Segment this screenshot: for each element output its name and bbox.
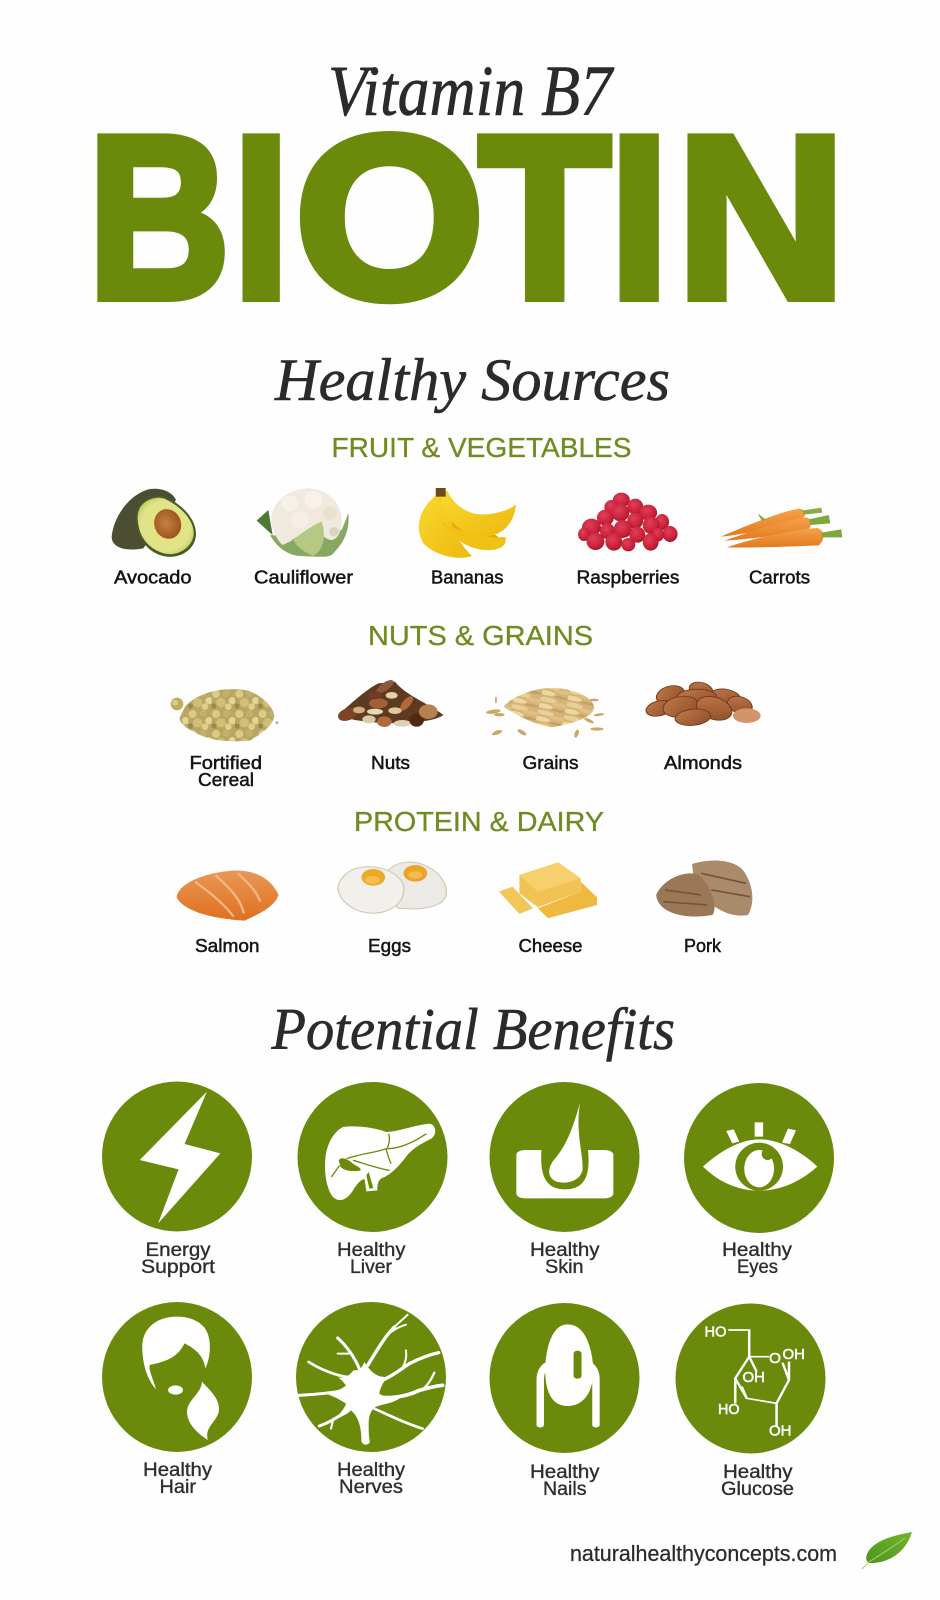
food: cheese xyxy=(499,862,597,956)
icon: woman with ponytail in circle xyxy=(102,1302,252,1452)
label: Healthy Glucose: Glucose xyxy=(721,1479,794,1500)
icon: glucose molecule in circle: OH xyxy=(769,1422,792,1440)
label: Healthy Nails: Nails xyxy=(543,1479,586,1500)
label: Grains: Grains xyxy=(522,752,578,773)
benefit: healthy skin xyxy=(490,1082,640,1278)
label: Healthy Nails xyxy=(530,1462,600,1500)
icon: neuron in circle xyxy=(296,1302,446,1452)
icon: glucose molecule in circle: OH xyxy=(742,1369,765,1386)
benefit: healthy glucose xyxy=(676,1304,826,1500)
label: Energy Support xyxy=(141,1240,216,1278)
food: salmon xyxy=(177,870,279,956)
title block xyxy=(88,51,846,347)
label: Healthy Glucose xyxy=(721,1462,794,1500)
label: Almonds: Almonds xyxy=(664,752,742,773)
icon: cereal xyxy=(171,689,278,741)
heading: BIOTIN: I xyxy=(609,89,669,347)
label: Healthy Eyes: Eyes xyxy=(737,1257,778,1278)
label: Carrots: Carrots xyxy=(749,566,810,588)
icon: lightning bolt in circle xyxy=(102,1082,252,1232)
icon: eye in circle xyxy=(684,1083,834,1233)
footer: website: naturalhealthyconcepts.com xyxy=(570,1541,837,1566)
icon: glucose molecule in circle xyxy=(676,1304,826,1454)
label: Healthy Eyes: Healthy xyxy=(722,1240,793,1261)
subtitle: Vitamin B7: Vitamin B7 xyxy=(328,51,615,131)
icon: glucose molecule in circle: O xyxy=(769,1350,781,1367)
icon: nuts xyxy=(336,678,443,727)
label: Healthy Hair: Hair xyxy=(160,1477,197,1498)
label: Healthy Hair: Healthy xyxy=(143,1460,213,1481)
icon: raspberries xyxy=(578,493,678,551)
icon: cheese xyxy=(499,862,597,918)
label: Energy Support: Support xyxy=(141,1257,216,1278)
label: Nuts: Nuts xyxy=(371,752,410,773)
food: raspberries xyxy=(576,493,680,588)
food: bananas xyxy=(419,488,516,588)
food: pork xyxy=(656,860,752,956)
food: nuts xyxy=(336,678,443,773)
icon: carrots xyxy=(721,508,842,548)
icon: bananas xyxy=(419,488,516,558)
heading: BIOTIN xyxy=(88,87,846,347)
food: almonds xyxy=(643,679,761,773)
benefit: healthy liver xyxy=(298,1082,448,1278)
label: Healthy Liver: Healthy xyxy=(337,1240,406,1261)
heading: Healthy Sources: Healthy Sources xyxy=(274,347,670,413)
label: Healthy Nerves xyxy=(337,1460,406,1498)
icon: pork xyxy=(656,860,752,917)
benefit: healthy nails xyxy=(490,1303,640,1500)
heading: BIOTIN: B xyxy=(88,87,230,347)
icon: glucose molecule in circle: HO xyxy=(704,1324,726,1340)
heading: BIOTIN: N xyxy=(676,89,846,347)
icon: liver in circle xyxy=(298,1082,448,1232)
heading: BIOTIN: O xyxy=(295,88,485,347)
icon: almonds xyxy=(643,679,761,727)
label: Eggs: Eggs xyxy=(368,935,411,956)
food: grains xyxy=(486,688,604,773)
heading: BIOTIN: T xyxy=(479,88,611,347)
icon: glucose molecule in circle: HO xyxy=(718,1401,740,1418)
icon: salmon xyxy=(177,870,279,921)
icon: eggs xyxy=(338,862,446,913)
heading: Protein and Dairy: PROTEIN & DAIRY xyxy=(354,806,604,837)
icon: glucose molecule in circle: OH xyxy=(782,1346,805,1363)
label: Healthy Nails: Healthy xyxy=(530,1462,600,1483)
heading: Fruit and Vegetables: FRUIT & VEGETABLES xyxy=(332,432,632,463)
label: Healthy Skin: Skin xyxy=(545,1257,584,1278)
label: Healthy Eyes xyxy=(722,1240,793,1278)
label: Pork: Pork xyxy=(684,935,722,956)
food: carrots xyxy=(721,508,842,588)
food: fortified cereal xyxy=(171,689,278,790)
icon: grains xyxy=(486,688,604,738)
label: Cheese: Cheese xyxy=(518,935,582,956)
label: Fortified Cereal xyxy=(190,752,262,790)
label: Fortified Cereal: Fortified xyxy=(190,752,262,773)
food: eggs xyxy=(338,862,446,956)
label: Healthy Liver: Liver xyxy=(350,1257,393,1278)
food: avocado xyxy=(112,489,196,588)
label: Healthy Skin: Healthy xyxy=(530,1240,600,1261)
label: Cauliflower: Cauliflower xyxy=(254,566,353,588)
label: Healthy Hair xyxy=(143,1460,213,1498)
label: Healthy Nerves: Nerves xyxy=(339,1477,403,1498)
benefit: healthy nerves xyxy=(296,1302,446,1498)
label: Healthy Liver xyxy=(337,1240,406,1278)
label: Raspberries: Raspberries xyxy=(576,566,680,588)
food: cauliflower xyxy=(254,488,353,588)
label: Fortified Cereal: Cereal xyxy=(198,769,254,790)
label: Energy Support: Energy xyxy=(146,1240,211,1261)
icon: avocado xyxy=(112,489,196,557)
label: Healthy Glucose: Healthy xyxy=(723,1462,793,1483)
benefit: healthy hair xyxy=(102,1302,252,1498)
heading: Nuts and Grains: NUTS & GRAINS xyxy=(368,620,593,651)
label: Avocado: Avocado xyxy=(114,566,192,588)
benefit: energy support xyxy=(102,1082,252,1278)
icon: cauliflower xyxy=(257,488,349,557)
heading: Potential Benefits: Potential Benefits xyxy=(271,996,675,1062)
heading: BIOTIN: I xyxy=(233,88,290,347)
label: Bananas: Bananas xyxy=(431,566,504,588)
label: Healthy Skin xyxy=(530,1240,600,1278)
label: Healthy Nerves: Healthy xyxy=(337,1460,406,1481)
icon: leaf xyxy=(862,1532,912,1569)
label: Salmon: Salmon xyxy=(195,935,260,956)
icon: hair follicle in circle xyxy=(490,1082,640,1232)
icon: fingernail in circle xyxy=(490,1303,640,1453)
benefit: healthy eyes xyxy=(684,1083,834,1278)
